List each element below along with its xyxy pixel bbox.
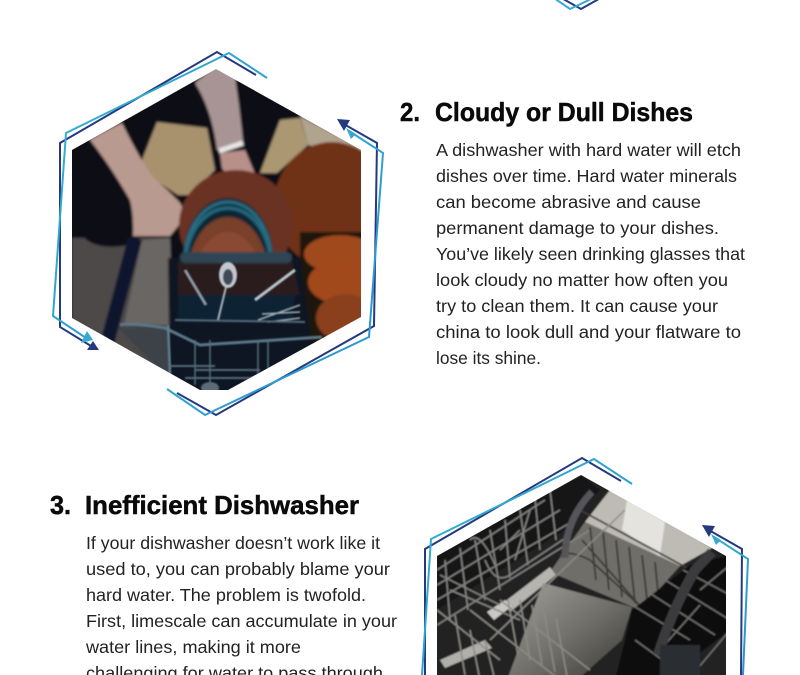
section 3 heading: Inefficient Dishwasher [85,490,359,520]
section 3 body text: water lines, making it more [85,637,301,657]
hexagon frame with arrows: photo 1 [53,52,383,415]
section 2 body text: dishes over time. Hard water minerals [436,166,737,186]
photo: open dishwasher racks [430,470,730,675]
section 3 heading: 3. [50,490,71,520]
section 3 body text: If your dishwasher doesn’t work like it [86,533,380,553]
section 2 body text: try to clean them. It can cause your [436,296,718,316]
section 3 body text [85,533,397,675]
hexagon frame with arrows: photo 3 [422,458,748,675]
section 3 body text: First, limescale can accumulate in your [86,611,397,631]
section 2 body text: can become abrasive and cause [436,192,701,212]
section 2 body text: You’ve likely seen drinking glasses that [436,244,745,264]
section 2 heading: Cloudy or Dull Dishes [435,97,693,127]
section 2 body text: permanent damage to your dishes. [436,218,719,238]
photo: hands loading plates into a dishwasher [72,69,361,390]
section 2 body text: look cloudy no matter how often you [436,270,728,290]
section 2 body text: lose its shine. [436,348,541,368]
section 3 body text: hard water. The problem is twofold. [86,585,366,605]
section 3 body text: used to, you can probably blame your [86,559,390,579]
section 2 heading: 2. [400,97,420,127]
section 2 body text: china to look dull and your flatware to [436,322,741,342]
section 2 body text: A dishwasher with hard water will etch [436,140,741,160]
section 2 body text [436,140,745,368]
frame fragment: previous section hexagon bottom [532,0,739,9]
